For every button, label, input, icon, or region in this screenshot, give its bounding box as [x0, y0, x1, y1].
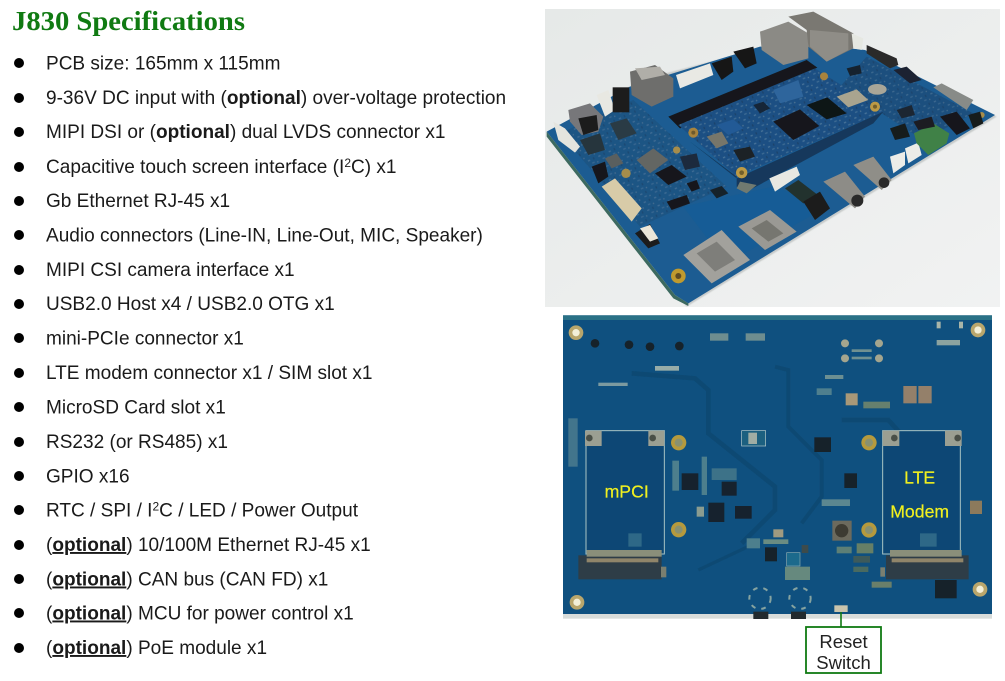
spec: RTC: C / LED / Power Output — [159, 500, 359, 522]
spec: RTC — [14, 500, 359, 522]
spec: touch screen: 2 — [344, 156, 351, 170]
spec: optional Ethernet: (optional) 10/100M Ethernet RJ-45 x1 — [46, 535, 371, 556]
label: LTE Modem — [890, 467, 949, 521]
spec: DC input: 9-36V DC input with (optional) over-voltage protection — [46, 88, 506, 109]
callout: reset switch: Switch — [816, 652, 871, 673]
callout: reset switch: Reset — [819, 631, 868, 652]
spec: LTE: LTE modem connector x1 / SIM slot x1 — [46, 363, 372, 384]
specification list — [14, 54, 506, 659]
spec: RS232: RS232 (or RS485) x1 — [46, 432, 228, 453]
spec: optional CAN: (optional) CAN bus (CAN FD) x1 — [46, 570, 328, 590]
spec: audio: Audio connectors (Line-IN, Line-Out, MIC, Speaker) — [46, 226, 483, 246]
spec: touch screen: Capacitive touch screen interface (I — [46, 157, 344, 178]
photo: top of board — [545, 9, 1000, 307]
label: mPCI: mPCI — [605, 481, 649, 501]
spec: RTC: 2 — [152, 500, 159, 514]
spec: MIPI DSI: MIPI DSI or (optional) dual LVDS connector x1 — [46, 122, 445, 143]
spec: optional PoE: (optional) PoE module x1 — [46, 638, 267, 659]
spec: mini-PCIe: mini-PCIe connector x1 — [46, 328, 244, 350]
title: J830 Specifications — [12, 6, 245, 36]
label: LTE Modem: Modem — [890, 501, 949, 521]
spec: camera: MIPI CSI camera interface x1 — [46, 260, 295, 281]
callout: reset switch — [806, 612, 881, 673]
spec: MicroSD: MicroSD Card slot x1 — [46, 398, 226, 418]
spec: GPIO: GPIO x16 — [46, 466, 130, 488]
spec: USB: USB2.0 Host x4 / USB2.0 OTG x1 — [46, 294, 335, 315]
spec: Ethernet: Gb Ethernet RJ-45 x1 — [46, 191, 230, 212]
spec: touch screen: C) x1 — [351, 157, 396, 178]
photo: bottom of board — [563, 315, 992, 619]
spec: optional MCU: (optional) MCU for power control x1 — [46, 604, 354, 624]
spec: PCB size: PCB size: 165mm x 115mm — [46, 54, 280, 74]
spec: RTC: RTC / SPI / I — [46, 500, 152, 522]
label: LTE Modem: LTE — [904, 467, 935, 487]
